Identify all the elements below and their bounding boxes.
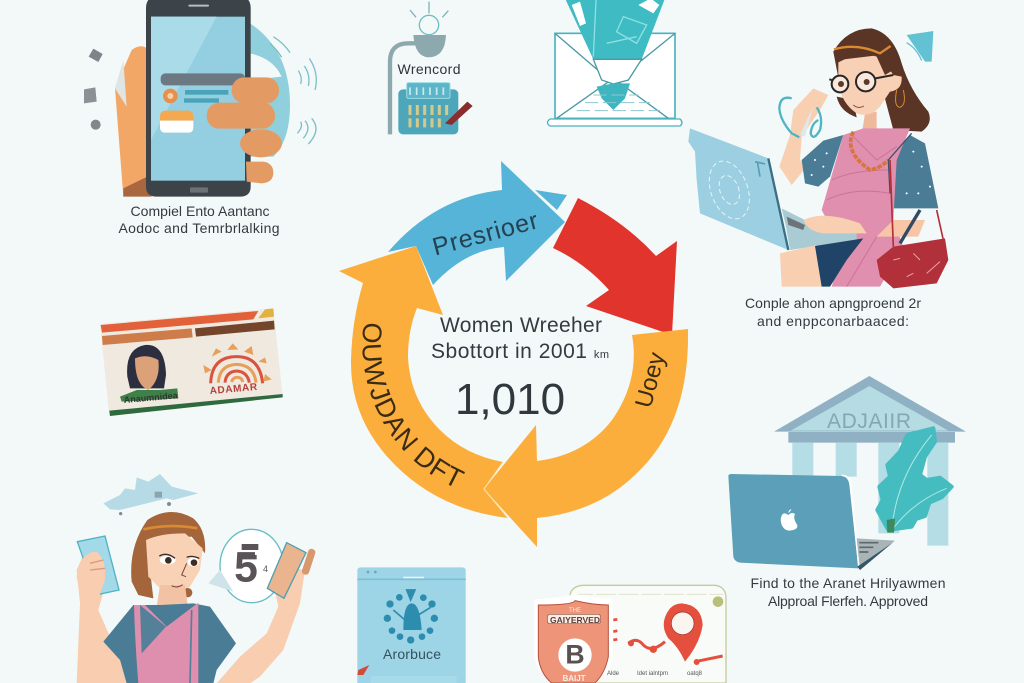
- panel: bank with laptop: [728, 376, 966, 609]
- arrow: orange right: [484, 329, 688, 547]
- chart: circular arrow cycle: [339, 161, 688, 547]
- center label line two: Sbottort in 2001 km: [431, 340, 609, 363]
- icon: phone held in hand: [84, 0, 316, 197]
- icon: lamp and form board: [390, 2, 473, 134]
- icon label: small A in bubble: 4: [263, 564, 268, 574]
- illustration: bank, laptop and leaf: [728, 376, 966, 570]
- label: Wrencord: Wrencord: [398, 61, 460, 77]
- label: ADJAIIR: ADJAIIR: [827, 410, 911, 433]
- caption: bank line one: Find to the Aranet Hrilyawmen: [750, 575, 946, 591]
- caption: phone: Compiel Ento Aantanc: [130, 203, 270, 219]
- browser window: [357, 567, 466, 683]
- caption: woman line two: and enppconarbaaced:: [757, 313, 909, 329]
- illustration: woman with phones: [77, 474, 316, 683]
- center number: 1,010: [455, 375, 565, 424]
- caption: phone line two: Aodoc and Temrbrlalking: [118, 220, 280, 236]
- map text middle: Idet ialntpm: [637, 671, 668, 677]
- label: Arorbuce: Arorbuce: [383, 646, 441, 662]
- panel: woman with laptop: [688, 28, 948, 329]
- arrow: red: [553, 198, 677, 335]
- illustration: woman with phones: 5: [234, 544, 258, 592]
- card text: name: Anaumnidea: [123, 390, 179, 405]
- map text right: oatq8: [687, 671, 703, 677]
- badge label: bottom: BAIJT: [562, 674, 586, 683]
- icon: envelope: [547, 0, 682, 126]
- caption: bank line two: Alpproal Flerfeh. Approved: [768, 593, 928, 609]
- center label line one: Women Wreeher: [440, 314, 602, 337]
- arrow label: curved left: OUWJDAN DFT: [362, 324, 465, 486]
- illustration: woman using laptop: [688, 28, 948, 288]
- caption: woman line one: Conple ahon apngproend 2r: [745, 295, 921, 311]
- card text: logo word: ADAMAR: [209, 382, 258, 397]
- panel: lamp and form: [390, 2, 473, 134]
- arrow label: Presrioer: Presrioer: [429, 206, 541, 261]
- panel: blue browser window: [357, 567, 466, 683]
- map card and badge: B: [565, 639, 585, 669]
- panel: shield and map card: [534, 585, 726, 683]
- badge label: GAIYERVED: GAIYERVED: [550, 615, 600, 625]
- arrow label: Uoey: Uoey: [630, 350, 671, 411]
- arrow: blue: [388, 161, 567, 285]
- icon: Aadhaar ID card: [100, 308, 283, 416]
- arrow: orange left: [339, 246, 508, 518]
- badge label: top: THE: [569, 608, 581, 614]
- panel: phone in hand: [84, 0, 316, 236]
- map card and badge: [534, 585, 726, 683]
- map text left: Alde: [607, 671, 620, 677]
